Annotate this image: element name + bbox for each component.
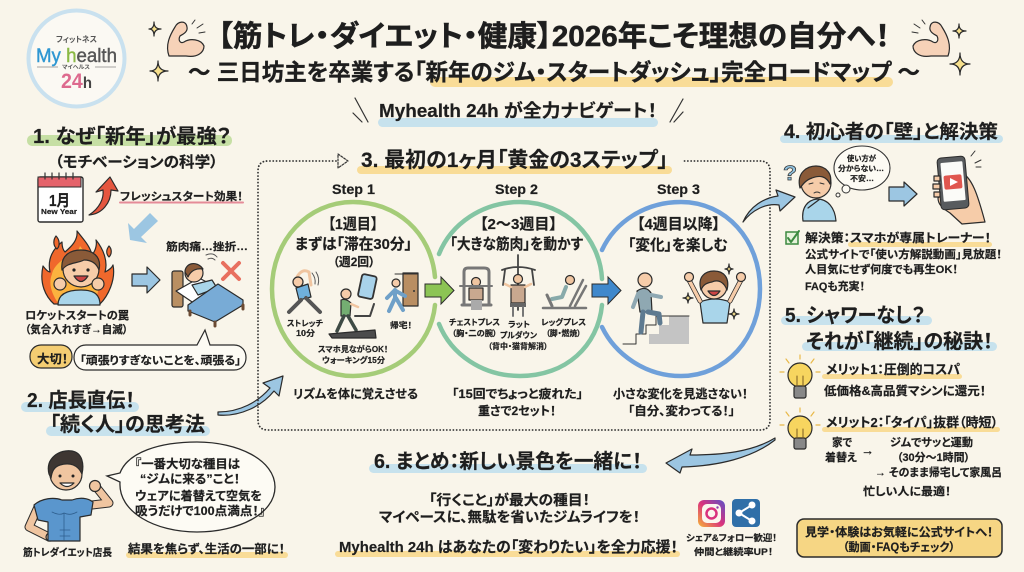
arrow: blue down-left: [128, 213, 158, 243]
heading: 5. シャワーなし？: [785, 304, 925, 327]
speech bubble: 『一番大切な種目は: [135, 456, 240, 471]
label: rocket start trap: ロケットスタートの罠: [25, 309, 129, 322]
icon: climbing figure on stairs: [623, 273, 689, 344]
emphasis strokes: [353, 98, 683, 122]
speech bubble: 吸うだけで100点満点！』: [135, 503, 265, 518]
heading: 「続く人」の思考法: [50, 413, 205, 436]
step label: Step 2: [495, 181, 538, 197]
panel: section 2 manager: [21, 376, 288, 559]
label: fresh start: フレッシュスタート効果！: [120, 190, 243, 203]
week: 【1週目】: [328, 216, 378, 233]
thought bubble: 使い方が: [847, 153, 877, 163]
solution highlight: [848, 242, 992, 247]
icon: red cross: [223, 263, 239, 279]
heading highlight: [369, 464, 647, 473]
icon: stretch figure: [289, 271, 320, 312]
merit 2 flow: → そのまま帰宅して家風呂: [875, 465, 1002, 479]
icon: bulb 2: [780, 408, 820, 449]
thought bubble: [834, 146, 890, 197]
icon: phone: [358, 274, 377, 299]
share caption: シェア&フォロー歓迎！: [686, 532, 777, 543]
panel: section 4 beginner wall: [780, 121, 1003, 293]
dotted frame: [258, 161, 770, 430]
labels: machines: （脚・燃焼）: [546, 328, 581, 338]
merit 1 highlight: [822, 374, 962, 379]
icon: calendar: 1月: [49, 193, 70, 210]
label: injury: 筋肉痛…挫折…: [166, 240, 248, 253]
icon: phone with video: [933, 151, 985, 224]
heading highlight line 2: [802, 342, 997, 351]
closing highlight: [335, 551, 680, 557]
labels: machines: ラット: [508, 320, 530, 329]
title: [149, 19, 970, 127]
solution text: 人目気にせず何度でも再生OK！: [805, 262, 958, 276]
closing line: Myhealth 24h はあなたの「変わりたい」を全力応援！: [339, 538, 678, 556]
caption: 「自分、変わってる！」: [628, 403, 735, 418]
step 1: [272, 181, 435, 401]
thought bubble: 分からない…: [838, 163, 884, 173]
step label: Step 3: [657, 181, 700, 197]
icon: happy person: [683, 264, 746, 323]
label: stretch: 10分: [296, 328, 315, 338]
body text: [379, 492, 640, 525]
subtitle: 〜 三日坊主を卒業する「新年のジム・スタートダッシュ」完全ロードマップ 〜: [188, 59, 920, 85]
label: stretch: ストレッチ: [287, 319, 323, 328]
speech bubble: ウェアに着替えて空気を: [135, 488, 262, 503]
goal: まずは「滞在30分」: [295, 236, 412, 253]
caption: 小さな変化を見逃さない！: [613, 386, 748, 401]
thought bubble: 不安…: [850, 173, 874, 183]
caption: [613, 386, 748, 418]
navigation line: Myhealth 24h が全力ナビゲート！: [379, 100, 657, 121]
icon: right flexed arm: [912, 20, 949, 56]
underline: [120, 202, 243, 204]
labels: machines: プルダウン: [500, 330, 537, 340]
icon: bulb 1: [780, 355, 820, 398]
solution text: 公式サイトで「使い方解説動画」見放題！: [805, 247, 1002, 261]
merit 2 flow: 忙しい人に最適！: [863, 484, 951, 498]
arrowhead: [338, 154, 348, 168]
ring: [272, 202, 435, 376]
labels: machines: チェストプレス: [449, 318, 500, 327]
caption: manager: 筋トレダイエット店長: [23, 546, 112, 559]
ring: [602, 202, 760, 376]
icon: right sparkles: [950, 24, 970, 75]
label: go home: 帰宅！: [390, 320, 412, 330]
label: walking: [318, 344, 388, 365]
panel: section 6 summary: [335, 450, 777, 557]
merit 1 text: 低価格&高品質マシンに還元！: [824, 383, 986, 398]
icon: manager flexing: [29, 451, 109, 541]
main heading: 【筋トレ・ダイエット・健康】2026年こそ理想の自分へ！: [218, 19, 890, 53]
arrow: blue step: [592, 277, 621, 304]
icon: chest press: [460, 268, 492, 310]
highlight: [126, 552, 288, 558]
speech bubble: [107, 442, 275, 532]
heading: [785, 304, 993, 353]
logo: My health 24h: [28, 10, 124, 106]
icon: left flexed arm: [168, 20, 205, 56]
label: stretch: [287, 319, 323, 338]
heading: 1. なぜ「新年」が最強？: [33, 124, 231, 148]
merit 2 flow: [825, 435, 1002, 498]
arrow: blue to section 6: [666, 438, 775, 473]
icon: instagram: [698, 500, 725, 527]
label: walking: ウォーキング15分: [322, 355, 385, 365]
share caption: [686, 532, 777, 557]
caption: 「15回でちょっと疲れた」: [452, 386, 583, 401]
step label: Step 1: [332, 181, 375, 197]
solution heading: 解決策：スマホが専属トレーナー！: [805, 230, 991, 245]
heading: 2. 店長直伝！: [27, 389, 135, 412]
navigation line highlight: [378, 118, 658, 127]
icon: calendar: New Year: [41, 207, 77, 216]
body text: 「行くこと」が最大の種目！: [429, 492, 590, 508]
label: walking: スマホ見ながらOK！: [318, 344, 388, 354]
goal: 「変化」を楽しむ: [628, 236, 728, 254]
body text: マイペースに、無駄を省いたジムライフを！: [379, 509, 640, 525]
merit 2 flow: （30分〜1時間）: [897, 450, 970, 464]
icon: walking home figure: [387, 273, 418, 311]
merit 2 flow: 着替え: [825, 450, 857, 464]
icon: question mark: ?: [783, 162, 797, 185]
icon: left sparkles: [149, 22, 168, 81]
merit 2 highlight: [822, 427, 1000, 432]
subheading: （モチベーションの科学）: [55, 153, 218, 171]
heading: 6. まとめ：新しい景色を一緒に！: [374, 450, 642, 473]
icon: worried person: [799, 166, 836, 221]
heading highlight line 2: [46, 426, 210, 436]
important pill: [30, 345, 72, 368]
icon: checkbox: [786, 231, 799, 244]
icon: leg press: [543, 276, 586, 308]
speech bubble: “ジムに来る”こと！: [140, 471, 240, 486]
labels: machines: （背中・猫背解消）: [488, 341, 548, 351]
merit 1 title: メリット1：圧倒的コスパ: [826, 362, 960, 377]
ring: [439, 202, 602, 376]
cta box: 見学・体験はお気軽に公式サイトへ！: [805, 525, 993, 539]
cta box: （動画・FAQもチェック）: [843, 540, 955, 554]
icon: share: [732, 499, 760, 527]
panel: section 3 dotted roadmap: [258, 149, 770, 430]
share caption: 仲間と継続率UP！: [694, 546, 773, 557]
icon: calendar: [38, 173, 83, 222]
labels: machines: （胸・二の腕）: [452, 328, 497, 338]
icon: person in bed: [172, 254, 243, 326]
arrow: red rising: [89, 177, 118, 215]
merit 2 title: メリット2：「タイパ」抜群（時短）: [826, 415, 998, 430]
heading highlight: [780, 135, 1003, 143]
arrow: blue to step 1: [218, 376, 283, 415]
logo: My health 24h: フィットネス: [56, 34, 97, 44]
logo: My health 24h: 24h: [61, 70, 92, 93]
heading: 3. 最初の1ヶ月「黄金の3ステップ」: [361, 149, 668, 172]
callout: key message: [74, 330, 246, 370]
caption: リズムを体に覚えさせる: [293, 386, 418, 401]
step 2: [439, 181, 602, 418]
caption: [452, 386, 583, 418]
merit 2 flow: 家で: [832, 435, 852, 449]
heading highlight line 1: [781, 316, 932, 325]
icon: lat pulldown: [502, 255, 535, 316]
icon: person in flames: [42, 231, 114, 305]
arrow: blue right: [889, 182, 917, 206]
labels: machines: [449, 317, 586, 351]
important pill: 大切！: [37, 351, 68, 366]
solution text: FAQも充実！: [805, 279, 865, 293]
arrow: green step: [425, 277, 454, 304]
heading: それが「継続」の秘訣！: [806, 329, 993, 353]
callout: key message: 「頑張りすぎないことを、頑張る」: [80, 353, 241, 367]
panel: section 5 no shower: [780, 304, 1002, 557]
heading: 4. 初心者の「壁」と解決策: [784, 121, 998, 143]
label: self destruct: （気合入れすぎ→自滅）: [25, 322, 128, 336]
heading highlight: [357, 166, 672, 174]
merit 2 flow: →: [861, 442, 874, 458]
cta box: [797, 519, 1002, 557]
frequency: （週2回）: [333, 254, 375, 269]
heading highlight line 1: [21, 402, 139, 412]
arrow: blue to section 4: [743, 190, 795, 222]
subtitle highlight: [430, 77, 893, 87]
takeaway: 結果を焦らず、生活の一部に！: [128, 541, 285, 556]
solution text: [805, 247, 1002, 293]
logo: My health 24h: My health: [36, 46, 117, 67]
panel: section 1 new year: [25, 124, 248, 370]
week: 【2〜3週目】: [480, 216, 557, 233]
step 3: [602, 181, 760, 418]
arrow: blue right: [132, 267, 160, 293]
icon: treadmill walker: [329, 289, 376, 338]
heading: [27, 389, 205, 436]
heading highlight: [27, 135, 232, 146]
caption: 重さで2セット！: [478, 403, 556, 418]
week: 【4週目以降】: [637, 216, 720, 233]
merit 2 flow: ジムでサッと運動: [890, 435, 973, 449]
goal: 「大きな筋肉」を動かす: [450, 235, 584, 253]
labels: machines: レッグプレス: [541, 317, 586, 327]
logo: My health 24h: マイヘルス: [62, 64, 91, 71]
